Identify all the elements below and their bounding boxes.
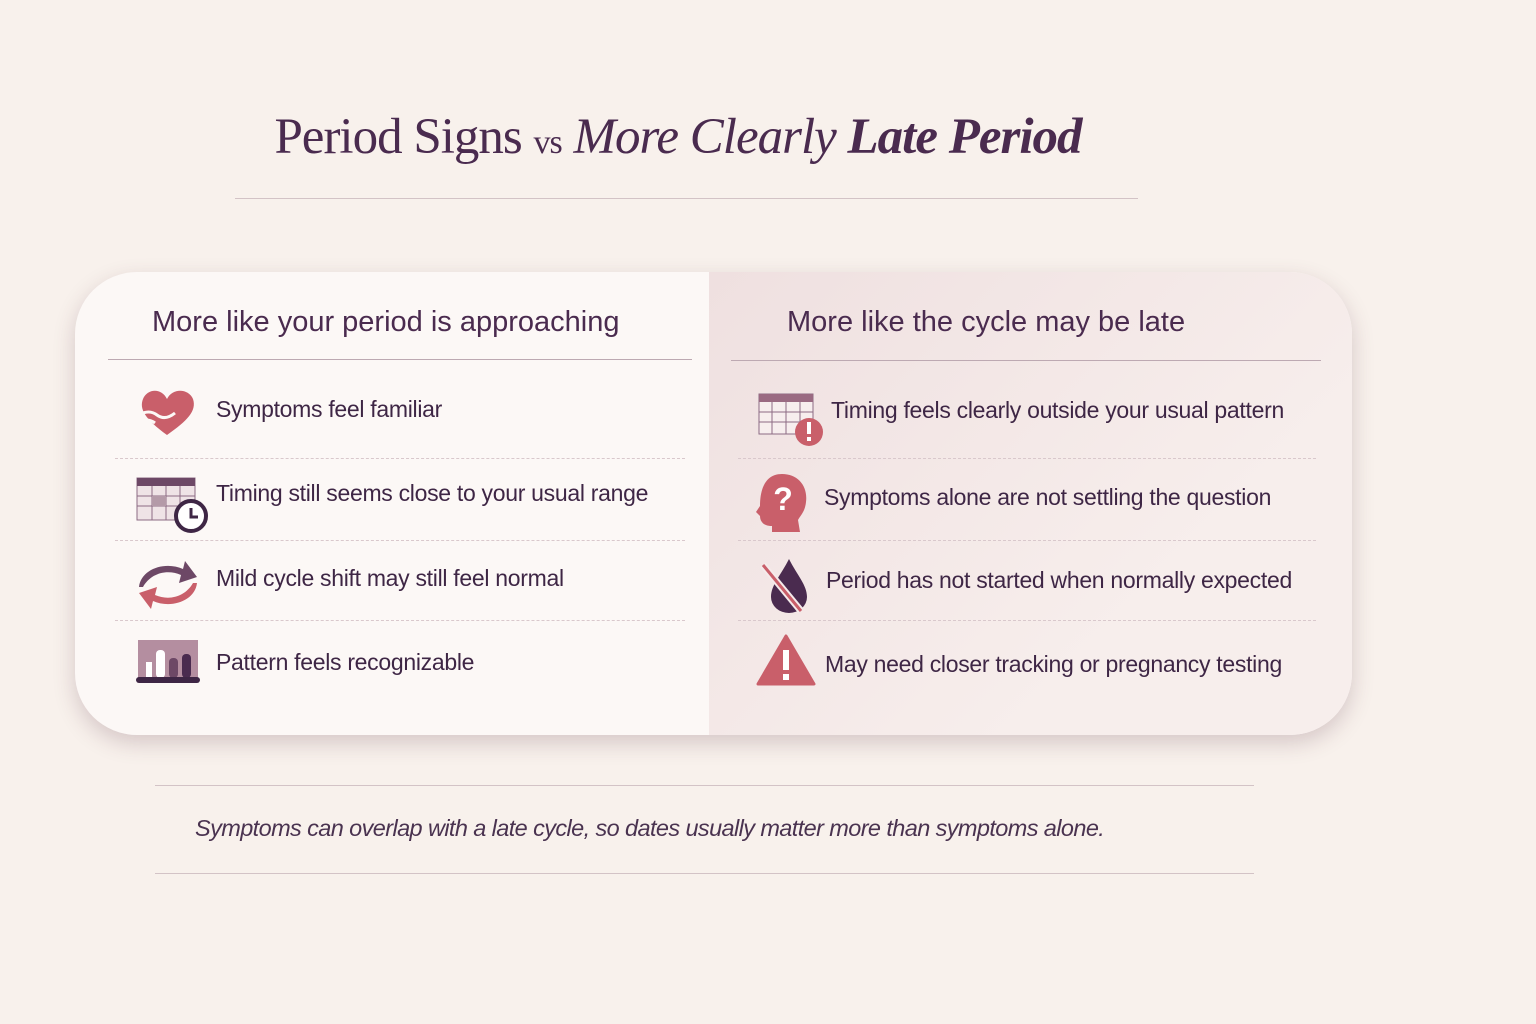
text: late item 3: Period has not started when normally expected: [826, 567, 1292, 593]
panel: comparison card: [75, 272, 1352, 735]
text: item 4: Pattern feels recognizable: [216, 649, 474, 675]
heading: approaching: More like your period is approaching: [152, 306, 619, 338]
title: Period Signs vs More Clearly Late Period: [274, 109, 1082, 165]
icon: calendar clock: [136, 478, 208, 533]
icon: calendar alert: [758, 394, 823, 446]
heading: late: More like the cycle may be late: [787, 306, 1185, 338]
text: item 2: Timing still seems close to your usual range: [216, 480, 648, 506]
text: late item 4: May need closer tracking or pregnancy testing: [825, 651, 1282, 677]
icon: cycle arrows: [139, 561, 197, 609]
text: item 3: Mild cycle shift may still feel normal: [216, 565, 564, 591]
text: item 1: Symptoms feel familiar: [216, 396, 442, 422]
footer note: Symptoms can overlap with a late cycle, so dates usually matter more than symptoms alone.: [195, 815, 1104, 841]
icon: head question: ?: [773, 481, 793, 517]
text: late item 1: Timing feels clearly outside your usual pattern: [831, 397, 1284, 423]
text: late item 2: Symptoms alone are not settling the question: [824, 484, 1271, 510]
icon: warning: [756, 634, 816, 686]
icon: heart: [142, 390, 194, 435]
panel: late side background: [709, 272, 1352, 735]
icon: head question: [756, 474, 806, 532]
icon: crossed drop: [762, 559, 807, 613]
icon: bar chart: [136, 640, 200, 683]
